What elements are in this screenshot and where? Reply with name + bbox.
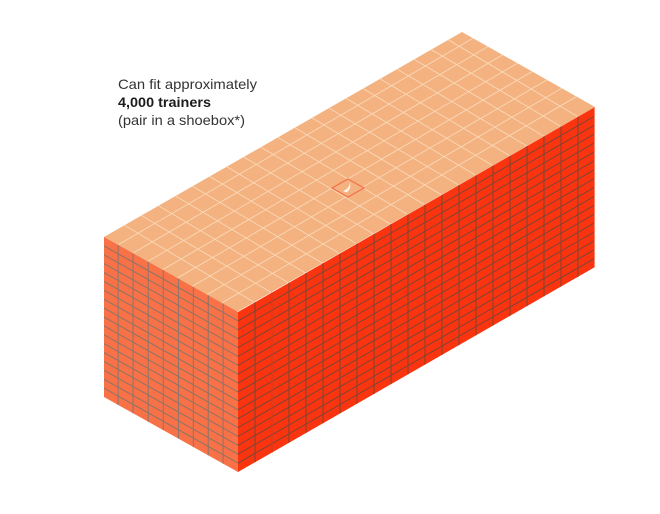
panel: top face of container	[104, 32, 595, 312]
panel: left face of container	[104, 237, 238, 472]
text block: capacity caption: (pair in a shoebox*)	[118, 112, 245, 128]
text block: capacity caption: 4,000 trainers	[118, 94, 211, 110]
text block: capacity caption	[118, 76, 257, 128]
icon: highlighted shoebox with tick logo	[332, 179, 364, 197]
text block: capacity caption: Can fit approximately	[118, 76, 257, 92]
panel: right face of container	[238, 107, 595, 472]
